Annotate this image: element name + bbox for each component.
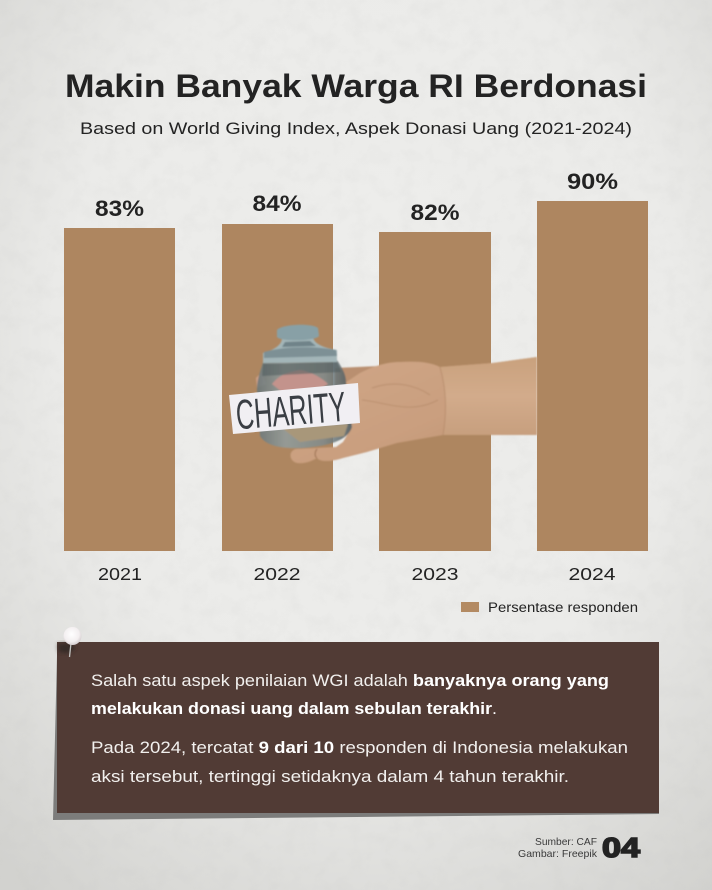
pin shadow bbox=[58, 643, 76, 653]
charity label bbox=[229, 383, 360, 438]
banknote in jar bbox=[272, 370, 328, 392]
panel background bbox=[57, 642, 659, 813]
finger divider bbox=[315, 449, 317, 458]
pin needle bbox=[70, 643, 71, 657]
subtitle: Based on World Giving Index, Aspek Donasi Uang (2021-2024) bbox=[80, 119, 632, 138]
arm and hand bbox=[290, 357, 537, 463]
neck highlight bbox=[282, 341, 316, 347]
bar chart bbox=[64, 169, 648, 584]
hand behind jar bbox=[335, 366, 380, 385]
paragraph 1: Salah satu aspek penilaian WGI adalah banyaknya orang yang bbox=[91, 671, 609, 690]
value 84%: 84% bbox=[252, 191, 302, 216]
legend label: Persentase responden bbox=[488, 600, 638, 615]
panel shadow bbox=[53, 655, 659, 820]
year 2022: 2022 bbox=[254, 564, 300, 584]
palm crease bbox=[362, 367, 445, 435]
fingertip behind jar bbox=[256, 372, 266, 388]
callout panel bbox=[53, 642, 659, 820]
pin head bbox=[64, 627, 82, 645]
label card bbox=[229, 383, 360, 434]
jar lid knob bbox=[277, 325, 319, 340]
paragraph 1 bbox=[91, 671, 609, 718]
value 83%: 83% bbox=[95, 196, 144, 221]
coins in jar bbox=[282, 424, 348, 442]
forearm bbox=[440, 357, 537, 435]
label text: CHARITY bbox=[234, 383, 348, 438]
year 2023: 2023 bbox=[412, 564, 458, 584]
jar lid neck bbox=[263, 337, 337, 363]
year 2024: 2024 bbox=[568, 564, 616, 584]
value 90%: 90% bbox=[567, 169, 618, 194]
bar 2023 bbox=[379, 232, 491, 551]
lid highlight bbox=[264, 347, 337, 358]
source line: Sumber: CAF bbox=[535, 836, 597, 848]
icon: push pin bbox=[58, 627, 82, 657]
legend bbox=[461, 600, 638, 615]
paragraph 2: aksi tersebut, tertinggi setidaknya dalam 4 tahun terakhir. bbox=[91, 767, 569, 786]
bar 2024 bbox=[537, 201, 648, 551]
photo: hand holding charity jar bbox=[229, 325, 537, 463]
paragraph 2: Pada 2024, tercatat 9 dari 10 responden di Indonesia melakukan bbox=[91, 738, 628, 757]
paragraph 1: melakukan donasi uang dalam sebulan terakhir . bbox=[91, 699, 497, 718]
image credit line: Gambar: Freepik bbox=[518, 848, 598, 860]
jar dark band bbox=[262, 362, 341, 376]
year 2021: 2021 bbox=[98, 564, 142, 584]
legend swatch bbox=[461, 602, 479, 612]
paragraph 2 bbox=[91, 738, 628, 786]
page number: 04 bbox=[602, 832, 641, 863]
title: Makin Banyak Warga RI Berdonasi bbox=[65, 68, 647, 104]
source credits bbox=[518, 836, 598, 860]
bar 2022 bbox=[222, 224, 333, 551]
bar 2021 bbox=[64, 228, 175, 551]
jar body bbox=[257, 360, 352, 448]
value 82%: 82% bbox=[410, 200, 460, 225]
